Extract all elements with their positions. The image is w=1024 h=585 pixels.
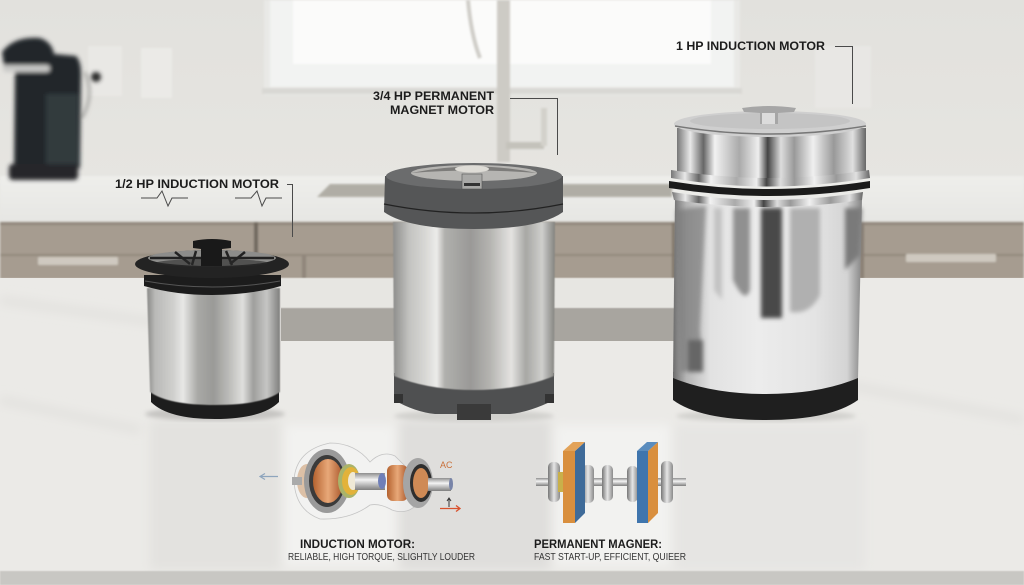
shaft (355, 473, 385, 490)
label: 1 HP induction motor (676, 39, 852, 104)
island ledge (270, 278, 685, 308)
marble counter (0, 278, 1024, 585)
caption: permanent magnet (534, 537, 686, 563)
label: 3/4 HP permanent magnet motor: 3/4 HP PERMANENT (373, 89, 495, 103)
window (262, 0, 742, 95)
base (151, 392, 279, 419)
end cap (297, 464, 317, 498)
back counter (0, 176, 1024, 222)
gasket rings (144, 275, 281, 295)
body (147, 288, 280, 405)
current arrows (447, 498, 451, 507)
copper coil (387, 465, 408, 501)
wall outlets (88, 46, 871, 108)
faucet (468, 0, 547, 162)
base (394, 373, 554, 414)
left magnet (563, 451, 575, 523)
caption: induction motor: RELIABLE, HIGH TORQUE, SLIGHTLY LOUDER (288, 552, 475, 563)
induction motor diagram (260, 443, 460, 519)
copper winding (313, 459, 343, 503)
caption: induction motor (288, 537, 475, 563)
lid (135, 250, 289, 278)
leader line (510, 98, 558, 155)
caption: permanent magnet: FAST START-UP, EFFICIENT, QUIEER (534, 552, 686, 563)
sink (317, 184, 672, 197)
shaft (536, 478, 686, 486)
body reflections (676, 206, 862, 372)
small disposal: 1/2 HP (135, 239, 289, 421)
large disposal: 1 HP (669, 106, 870, 422)
base (673, 372, 858, 420)
label: 1/2 HP induction motor (115, 177, 292, 237)
coffee maker (2, 38, 101, 180)
lid top (674, 111, 866, 137)
leader line (835, 46, 852, 104)
cabinets (0, 222, 1024, 279)
middle disposal: 3/4 HP (384, 163, 563, 422)
body (673, 198, 862, 394)
stator ring (304, 449, 350, 513)
output shaft (428, 478, 451, 491)
label: 3/4 HP permanent magnet motor: MAGNET MOTOR (390, 103, 494, 117)
rotor discs (548, 462, 560, 502)
waveform icons (141, 191, 282, 206)
flow arrow (260, 474, 278, 480)
yellow rotor ring (338, 464, 360, 498)
label: 1/2 HP induction motor: 1/2 HP INDUCTION MOTOR (115, 177, 279, 191)
caption: induction motor: INDUCTION MOTOR: (300, 537, 415, 551)
label: 1 HP induction motor: 1 HP INDUCTION MOTOR (676, 39, 825, 53)
front bearing ring (403, 458, 433, 508)
body (393, 222, 555, 390)
lid (384, 176, 563, 229)
upper section (677, 128, 866, 178)
latch (455, 166, 489, 172)
knob (742, 106, 796, 124)
leader line (287, 184, 292, 237)
AC label: AC (440, 460, 453, 470)
right magnet (637, 451, 648, 523)
counter reflections (150, 420, 865, 570)
label: 3/4 HP permanent magnet motor (373, 89, 558, 155)
kitchen background (0, 0, 1024, 342)
sealing band (671, 170, 870, 186)
transparent housing (294, 443, 420, 519)
permanent magnet diagram (536, 442, 686, 523)
caption: permanent magnet: PERMANENT MAGNER: (534, 537, 662, 551)
knob (193, 239, 231, 266)
